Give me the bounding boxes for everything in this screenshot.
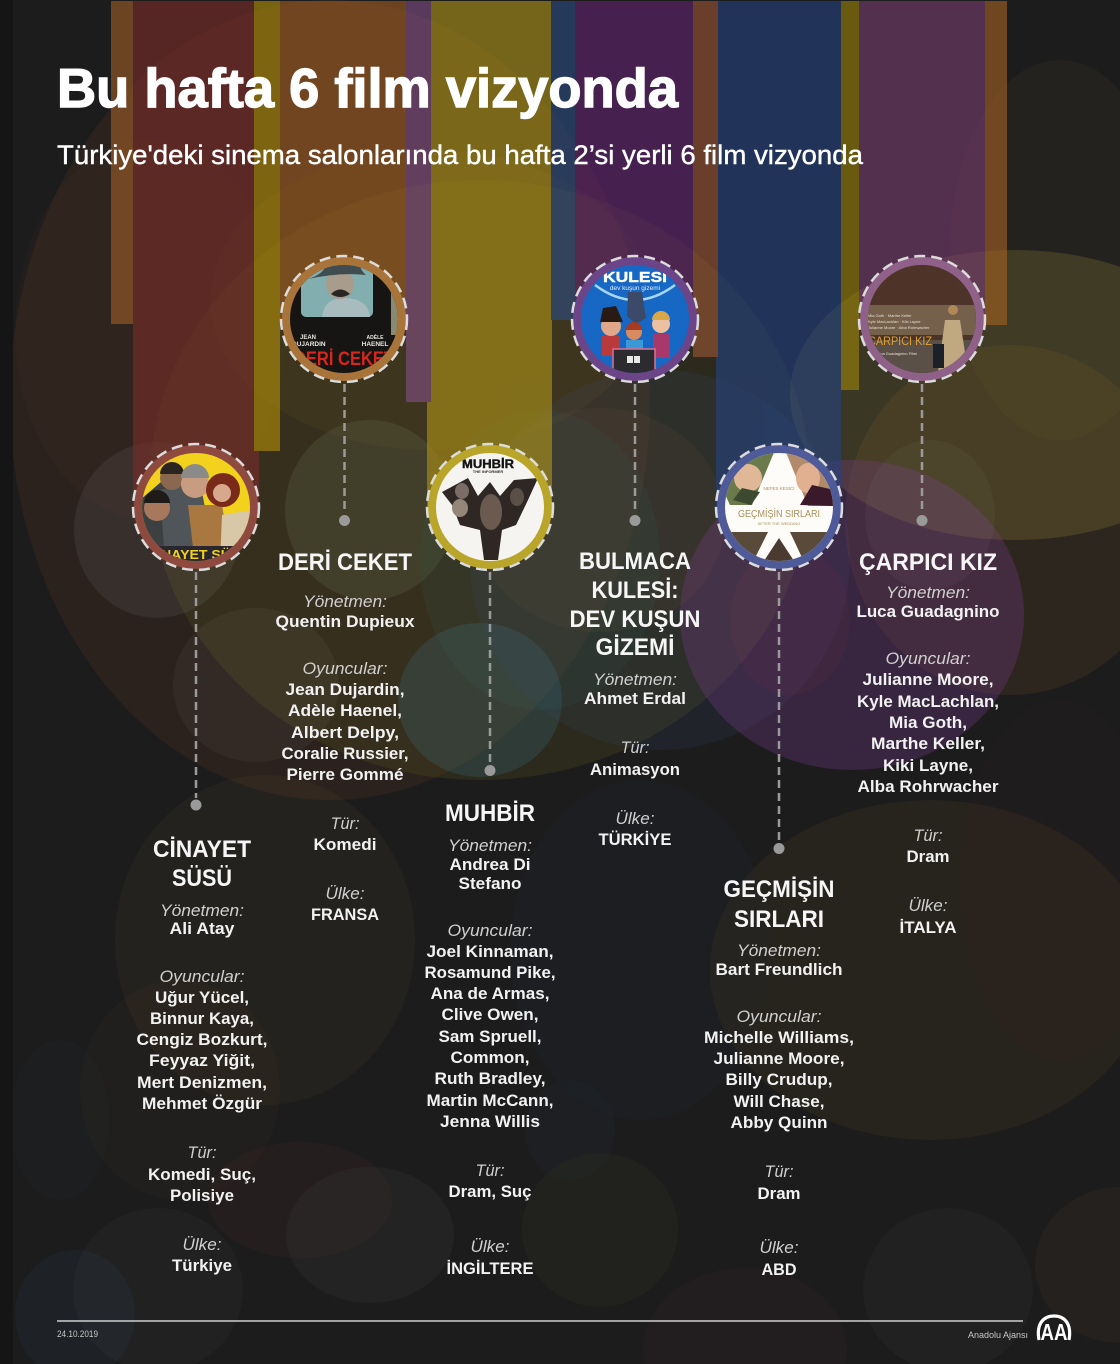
panel: Muhbir bbox=[424, 444, 556, 1278]
source: Anadolu Ajansı bbox=[968, 1330, 1028, 1340]
film info: Cinayet Süsü: Polisiye bbox=[170, 1186, 234, 1205]
film info: Geçmişin Sırları: Michelle Williams, bbox=[704, 1028, 854, 1047]
poster: Geçmişin Sırları: AFTER THE WEDDING bbox=[758, 521, 800, 526]
film info: Çarpıcı Kız: İTALYA bbox=[900, 918, 956, 937]
poster: Muhbir: MUHBİR bbox=[462, 456, 514, 471]
poster: Deri Ceket: DERİ CEKET bbox=[294, 349, 394, 370]
film info: Deri Ceket: Adèle Haenel, bbox=[288, 701, 402, 720]
film info: Geçmişin Sırları: Yönetmen: bbox=[737, 941, 821, 960]
film info: Cinayet Süsü: Cengiz Bozkurt, bbox=[136, 1030, 268, 1049]
film info: Deri Ceket: Tür: bbox=[330, 814, 360, 833]
film info: Bulmaca Kulesi: DEV KUŞUN bbox=[570, 606, 700, 633]
connector dot bbox=[774, 843, 784, 854]
film info: Cinayet Süsü: Mehmet Özgür bbox=[142, 1094, 262, 1113]
connector dot bbox=[630, 515, 640, 526]
poster: Bulmaca Kulesi: dev kuşun gizemi bbox=[610, 285, 660, 292]
film info: Cinayet Süsü: Ali Atay bbox=[170, 919, 235, 938]
connector line bbox=[634, 384, 636, 514]
film info: Çarpıcı Kız: Oyuncular: bbox=[886, 649, 971, 668]
film info: Geçmişin Sırları: Will Chase, bbox=[734, 1092, 824, 1111]
date: 24.10.2019 bbox=[57, 1329, 98, 1340]
film info: Muhbir: Joel Kinnaman, bbox=[426, 942, 554, 961]
film info: Muhbir: Stefano bbox=[458, 874, 522, 893]
film info: Cinayet Süsü: Binnur Kaya, bbox=[150, 1009, 254, 1028]
film info: Muhbir: MUHBİR bbox=[445, 800, 535, 827]
film info: Geçmişin Sırları: GEÇMİŞİN bbox=[724, 876, 834, 903]
film info: Muhbir: Martin McCann, bbox=[426, 1091, 554, 1110]
connector dot bbox=[484, 765, 496, 776]
connector dot bbox=[916, 515, 928, 526]
subtitle: Türkiye'deki sinema salonlarında bu hafta 2’si yerli 6 film vizyonda bbox=[57, 140, 864, 170]
film info: Çarpıcı Kız: ÇARPICI KIZ bbox=[859, 549, 997, 576]
film info: Deri Ceket: FRANSA bbox=[311, 905, 379, 924]
film info: Bulmaca Kulesi bbox=[570, 548, 700, 849]
film info: Çarpıcı Kız: Kiki Layne, bbox=[883, 756, 973, 775]
panel: Deri Ceket bbox=[276, 256, 415, 924]
film info: Geçmişin Sırları: Ülke: bbox=[760, 1238, 799, 1257]
poster: Geçmişin Sırları: GEÇMİŞİN SIRLARI bbox=[738, 507, 820, 520]
film info: Bulmaca Kulesi: Ahmet Erdal bbox=[584, 689, 686, 708]
poster: Deri Ceket: HAENEL bbox=[362, 341, 388, 348]
film info: Cinayet Süsü: Uğur Yücel, bbox=[155, 988, 249, 1007]
film info: Bulmaca Kulesi: Yönetmen: bbox=[593, 670, 677, 689]
poster: Çarpıcı Kız: Mia Goth · Marthe Keller bbox=[868, 313, 912, 318]
poster: Muhbir bbox=[427, 444, 553, 570]
film info: Muhbir: Jenna Willis bbox=[440, 1112, 540, 1131]
film info: Muhbir: Ana de Armas, bbox=[430, 984, 550, 1003]
film info: Cinayet Süsü: Oyuncular: bbox=[160, 967, 245, 986]
footer bbox=[57, 1316, 1070, 1345]
film info: Bulmaca Kulesi: BULMACA bbox=[579, 548, 691, 575]
connector line bbox=[195, 572, 197, 798]
film info: Deri Ceket: Jean Dujardin, bbox=[286, 680, 404, 699]
film info: Geçmişin Sırları: Tür: bbox=[764, 1162, 794, 1181]
film info: Cinayet Süsü: Türkiye bbox=[172, 1256, 232, 1275]
title: Bu hafta 6 film vizyonda bbox=[57, 57, 678, 119]
film info: Geçmişin Sırları: Bart Freundlich bbox=[716, 960, 842, 979]
connector line bbox=[778, 572, 780, 842]
film info: Bulmaca Kulesi: GİZEMİ bbox=[596, 634, 674, 661]
film info: Deri Ceket: DERİ CEKET bbox=[278, 549, 412, 576]
film info: Deri Ceket: Pierre Gommé bbox=[286, 765, 404, 784]
film info: Muhbir: Tür: bbox=[476, 1161, 505, 1180]
film info: Muhbir bbox=[424, 800, 556, 1278]
film info: Bulmaca Kulesi: Tür: bbox=[620, 738, 650, 757]
film info: Muhbir: Clive Owen, bbox=[442, 1005, 538, 1024]
film info: Geçmişin Sırları: Julianne Moore, bbox=[714, 1049, 844, 1068]
poster: Cinayet Süsü bbox=[133, 444, 259, 570]
poster: Deri Ceket: JEAN bbox=[300, 335, 316, 341]
panel: Geçmişin Sırları bbox=[704, 444, 854, 1279]
poster: Deri Ceket: ADÈLE bbox=[367, 333, 384, 341]
film info: Muhbir: Sam Spruell, bbox=[438, 1027, 542, 1046]
film info: Muhbir: Rosamund Pike, bbox=[424, 963, 556, 982]
connector line bbox=[921, 384, 923, 514]
poster: Deri Ceket bbox=[281, 256, 407, 382]
film info: Cinayet Süsü: Feyyaz Yiğit, bbox=[149, 1051, 255, 1070]
film info: Bulmaca Kulesi: TÜRKİYE bbox=[598, 830, 672, 849]
film info: Cinayet Süsü: Mert Denizmen, bbox=[137, 1073, 267, 1092]
film info: Geçmişin Sırları: Dram bbox=[758, 1184, 800, 1203]
film info: Muhbir: İNGİLTERE bbox=[446, 1259, 534, 1278]
film info: Çarpıcı Kız: Mia Goth, bbox=[889, 713, 967, 732]
film info: Çarpıcı Kız: Alba Rohrwacher bbox=[858, 777, 999, 796]
poster: Çarpıcı Kız: Luca Guadagnino Filmi bbox=[876, 351, 917, 356]
film info: Çarpıcı Kız: Tür: bbox=[914, 826, 943, 845]
poster: Çarpıcı Kız: Julianne Moore · Alba Rohrwacher bbox=[868, 325, 930, 330]
film info: Deri Ceket: Ülke: bbox=[326, 884, 365, 903]
film info: Cinayet Süsü: Komedi, Suç, bbox=[148, 1165, 256, 1184]
film info: Çarpıcı Kız: Marthe Keller, bbox=[871, 734, 985, 753]
poster: Bulmaca Kulesi: KULESİ bbox=[603, 269, 667, 286]
poster: Deri Ceket: DUJARDIN bbox=[292, 341, 326, 348]
poster: Çarpıcı Kız: ÇARPICI KIZ bbox=[868, 334, 932, 348]
film info: Çarpıcı Kız bbox=[856, 549, 1000, 937]
coloured film-strip bars bbox=[111, 1, 1007, 507]
poster: Cinayet Süsü: NAYET SÜ bbox=[161, 547, 231, 562]
film info: Geçmişin Sırları bbox=[704, 876, 854, 1279]
film info: Cinayet Süsü bbox=[136, 836, 268, 1275]
panel: Cinayet Süsü bbox=[133, 444, 268, 1275]
film info: Çarpıcı Kız: Dram bbox=[906, 847, 950, 866]
icon: Anadolu Ajansı logo: AA bbox=[1040, 1319, 1068, 1345]
film info: Muhbir: Andrea Di bbox=[450, 855, 530, 874]
film info: Bulmaca Kulesi: Animasyon bbox=[590, 760, 680, 779]
film info: Deri Ceket: Quentin Dupieux bbox=[276, 612, 415, 631]
connector dot bbox=[339, 515, 350, 526]
film info: Deri Ceket bbox=[276, 549, 415, 924]
film info: Cinayet Süsü: Yönetmen: bbox=[160, 901, 244, 920]
connector line bbox=[489, 572, 491, 764]
poster: Çarpıcı Kız: Kyle MacLachlan · Kiki Layne bbox=[868, 319, 921, 324]
poster: Muhbir: THE INFORMER bbox=[473, 469, 503, 474]
film info: Cinayet Süsü: Tür: bbox=[188, 1143, 217, 1162]
film info: Deri Ceket: Coralie Russier, bbox=[282, 744, 408, 763]
poster: Geçmişin Sırları bbox=[716, 444, 842, 570]
film info: Çarpıcı Kız: Yönetmen: bbox=[886, 583, 970, 602]
film info: Cinayet Süsü: SÜSÜ bbox=[172, 865, 232, 892]
film info: Deri Ceket: Albert Delpy, bbox=[291, 723, 399, 742]
film info: Muhbir: Yönetmen: bbox=[448, 836, 532, 855]
film info: Deri Ceket: Komedi bbox=[314, 835, 376, 854]
film info: Muhbir: Dram, Suç bbox=[448, 1182, 532, 1201]
film info: Muhbir: Oyuncular: bbox=[448, 921, 533, 940]
film info: Muhbir: Ülke: bbox=[470, 1237, 510, 1256]
panel: Bulmaca Kulesi bbox=[570, 256, 700, 849]
film info: Cinayet Süsü: Ülke: bbox=[182, 1235, 222, 1254]
film info: Çarpıcı Kız: Ülke: bbox=[908, 896, 948, 915]
connector line bbox=[343, 384, 346, 514]
film info: Çarpıcı Kız: Julianne Moore, bbox=[862, 670, 994, 689]
film info: Bulmaca Kulesi: KULESİ: bbox=[592, 577, 678, 604]
panel: Çarpıcı Kız bbox=[856, 256, 1000, 937]
film info: Deri Ceket: Yönetmen: bbox=[303, 592, 387, 611]
connector dot bbox=[190, 800, 202, 810]
poster: Bulmaca Kulesi bbox=[572, 256, 698, 382]
film info: Çarpıcı Kız: Luca Guadagnino bbox=[856, 602, 1000, 621]
poster: Geçmişin Sırları: NEFES KESİCİ bbox=[763, 485, 795, 491]
film info: Geçmişin Sırları: ABD bbox=[762, 1260, 796, 1279]
film info: Geçmişin Sırları: Oyuncular: bbox=[736, 1007, 822, 1026]
film info: Cinayet Süsü: CİNAYET bbox=[153, 836, 251, 863]
film info: Deri Ceket: Oyuncular: bbox=[302, 659, 388, 678]
film info: Muhbir: Common, bbox=[450, 1048, 530, 1067]
film info: Geçmişin Sırları: Billy Crudup, bbox=[726, 1070, 832, 1089]
film info: Geçmişin Sırları: Abby Quinn bbox=[730, 1113, 828, 1132]
poster: Çarpıcı Kız bbox=[859, 256, 985, 382]
film info: Geçmişin Sırları: SIRLARI bbox=[734, 906, 824, 933]
film info: Çarpıcı Kız: Kyle MacLachlan, bbox=[857, 692, 999, 711]
film info: Bulmaca Kulesi: Ülke: bbox=[616, 809, 655, 828]
film info: Muhbir: Ruth Bradley, bbox=[434, 1069, 546, 1088]
